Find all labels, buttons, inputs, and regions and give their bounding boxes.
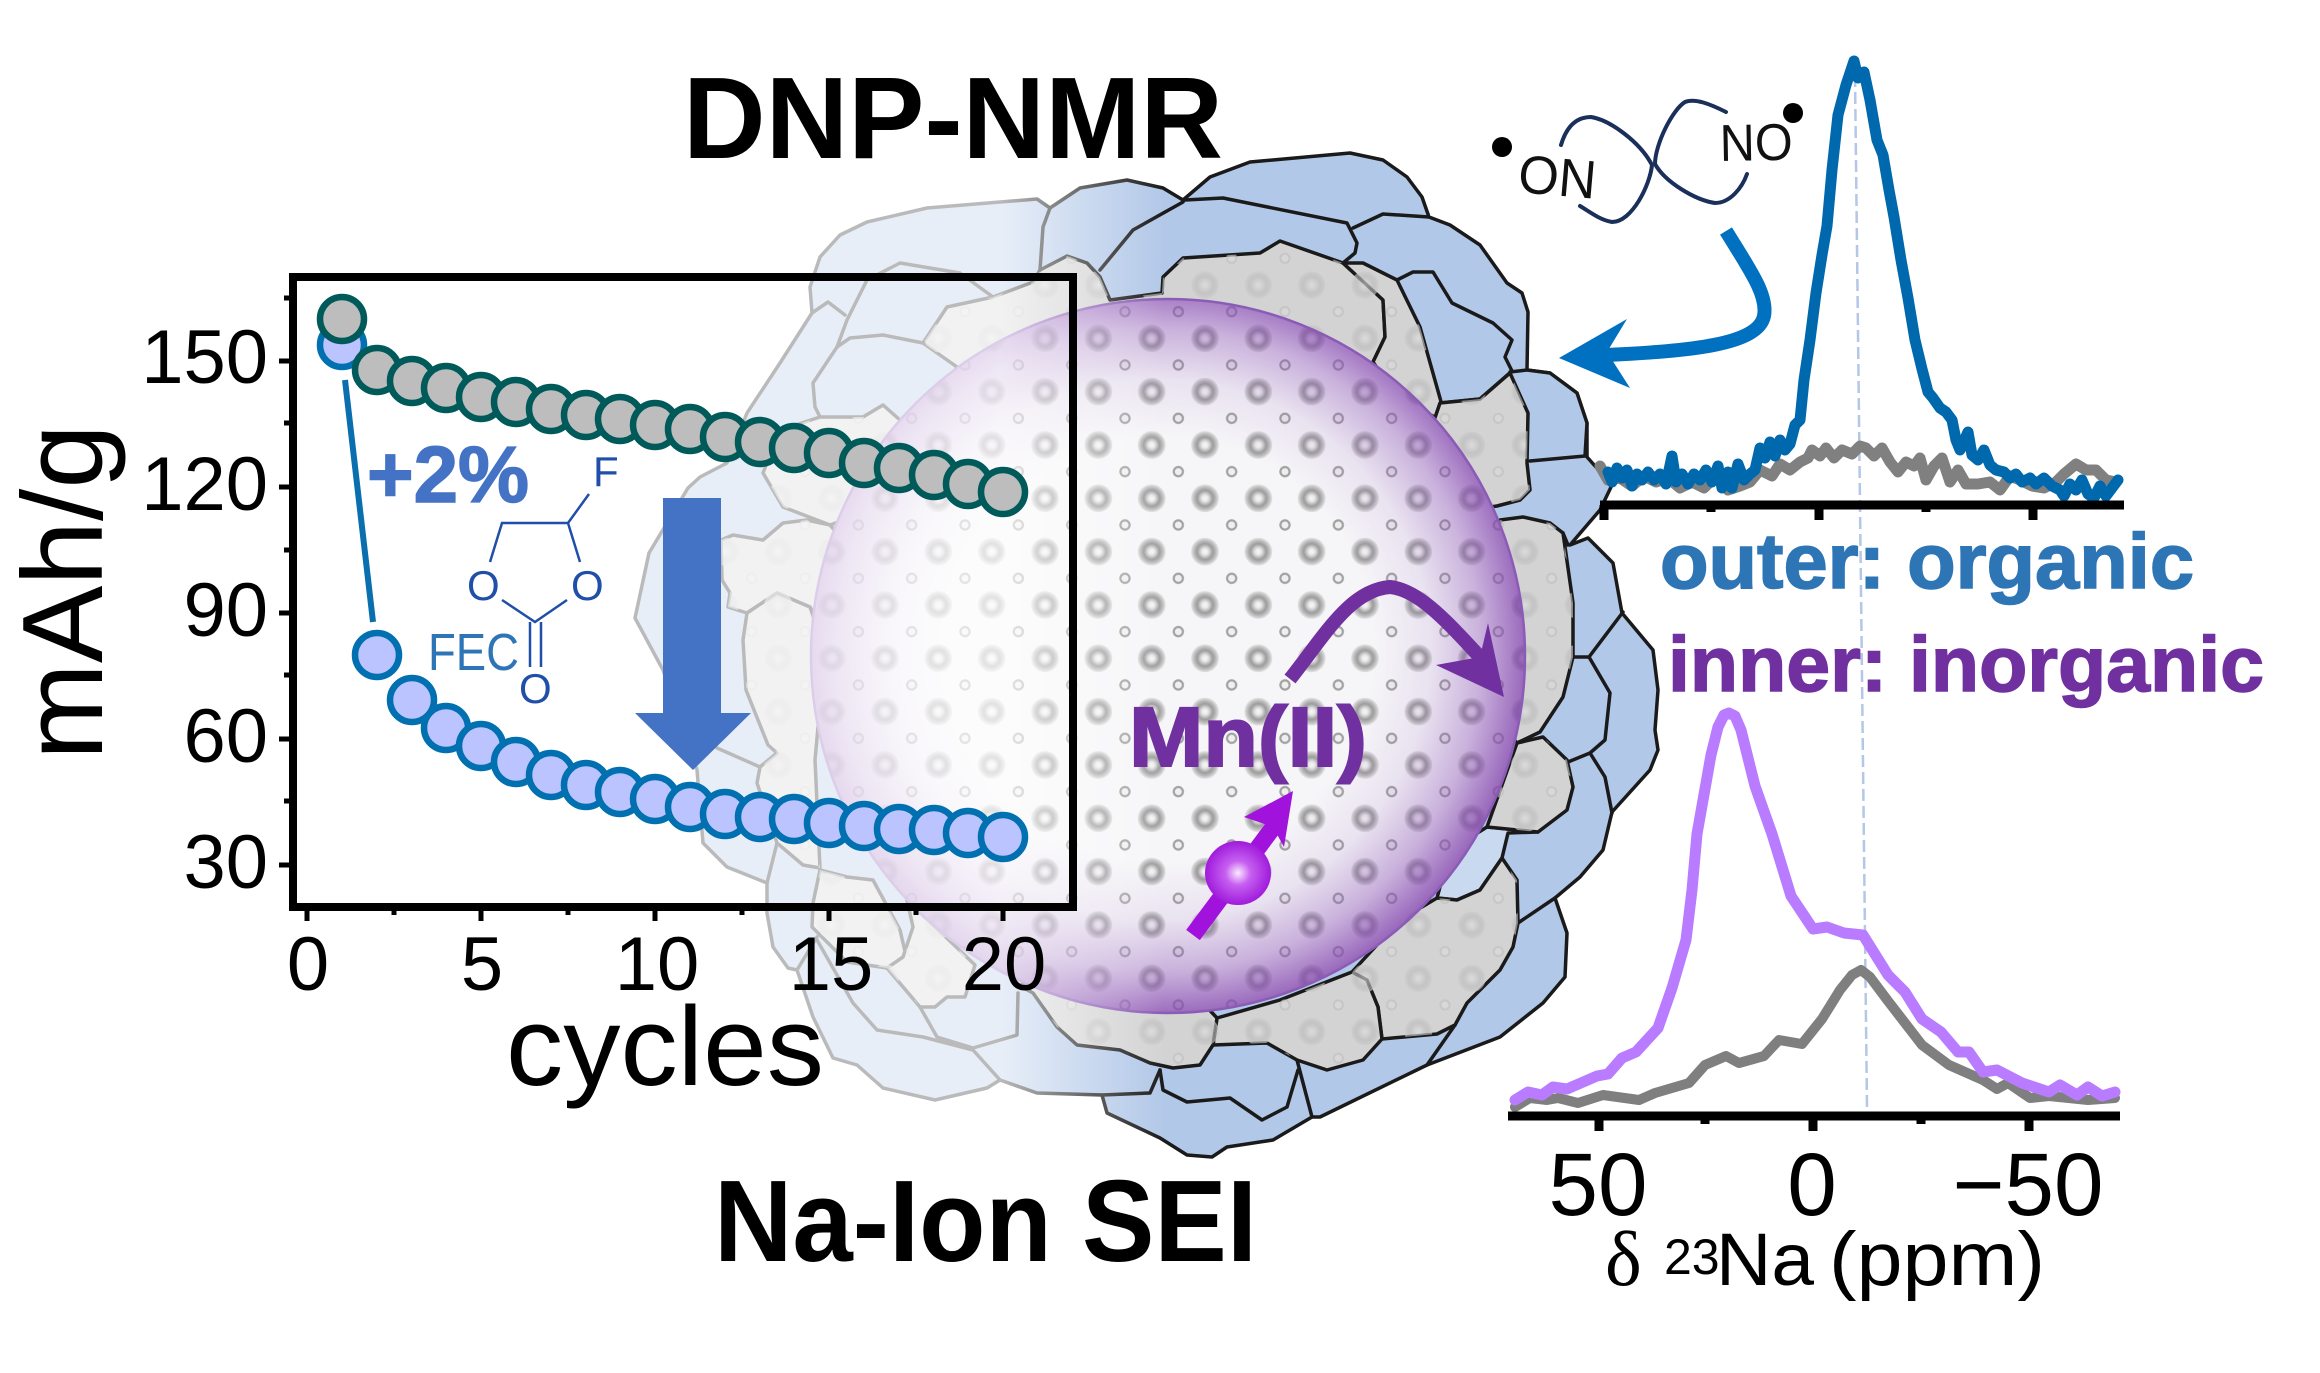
x axis numbers: 10 bbox=[615, 922, 699, 1007]
outer: organic label: outer: organic bbox=[1660, 517, 2194, 605]
x axis numbers: 15 bbox=[789, 922, 873, 1007]
radical AMUPol molecule: ON bbox=[1516, 144, 1599, 211]
outer blue organic SEI layer bbox=[635, 153, 1658, 1157]
FEC molecule: O bbox=[571, 562, 604, 609]
FEC molecule bbox=[428, 448, 619, 712]
left white fade over particle bbox=[600, 150, 1180, 1160]
inner: inorganic label: inner: inorganic bbox=[1668, 620, 2264, 708]
radical AMUPol molecule: NO bbox=[1719, 114, 1793, 173]
blue data series: with no FEC bbox=[320, 323, 1025, 859]
x axis title: cycles bbox=[506, 984, 824, 1109]
faint pores on grey layer bbox=[721, 241, 1573, 1070]
ppm axis numbers bbox=[1548, 1134, 2103, 1234]
y axis numbers: 30 bbox=[183, 820, 268, 905]
capacity drop arrow bbox=[635, 498, 751, 770]
connector line bbox=[345, 380, 373, 622]
FEC molecule: FEC bbox=[428, 624, 519, 682]
dashed reference line bbox=[1855, 75, 1867, 1107]
title: Na-Ion SEI: Na-Ion SEI bbox=[714, 1156, 1257, 1286]
purple trace bbox=[1515, 713, 2115, 1100]
FEC molecule: F bbox=[593, 448, 619, 495]
x axis numbers: 5 bbox=[461, 922, 503, 1007]
x axis numbers bbox=[287, 922, 1046, 1007]
grey trace bbox=[1515, 970, 2115, 1107]
pale blue gap near sphere bbox=[1437, 827, 1538, 900]
grey data series: with FEC bbox=[320, 297, 1025, 514]
+2% label: +2% bbox=[367, 430, 529, 519]
radical AMUPol molecule bbox=[1492, 101, 1803, 222]
y axis numbers: 120 bbox=[141, 442, 268, 527]
upper spectrum bbox=[1600, 61, 2124, 520]
axis bbox=[1600, 505, 2124, 520]
y axis numbers: 60 bbox=[183, 694, 268, 779]
title: DNP-NMR: DNP-NMR bbox=[683, 53, 1223, 183]
purple arrow from Mn(II) bbox=[1290, 587, 1504, 697]
blue trace bbox=[1608, 61, 2118, 498]
axis ticks bbox=[279, 298, 1003, 921]
y axis title: mAh/g bbox=[0, 424, 127, 760]
ppm axis title: (ppm) bbox=[1829, 1217, 2045, 1302]
ppm axis title bbox=[1605, 1215, 2045, 1302]
hard carbon sphere with Mn(II) doping bbox=[810, 298, 1526, 1014]
inner grey inorganic SEI layer bbox=[721, 241, 1573, 1070]
y axis numbers: 150 bbox=[141, 315, 268, 400]
SEI particle bbox=[635, 153, 1658, 1157]
ppm axis numbers: 50 bbox=[1548, 1134, 1648, 1234]
FEC molecule: O bbox=[467, 562, 500, 609]
chart frame bbox=[293, 277, 1073, 907]
x axis numbers: 20 bbox=[962, 922, 1046, 1007]
axis bbox=[1508, 1116, 2120, 1131]
y axis numbers: 90 bbox=[183, 568, 268, 653]
FEC molecule: O bbox=[519, 665, 552, 712]
ppm axis numbers: −50 bbox=[1953, 1134, 2103, 1234]
blue arrow to outer layer bbox=[1559, 231, 1765, 388]
ppm axis title: 23 bbox=[1664, 1229, 1720, 1285]
ppm axis title: δ bbox=[1605, 1215, 1642, 1302]
grey trace bbox=[1600, 446, 2116, 490]
ppm axis numbers: 0 bbox=[1787, 1134, 1837, 1234]
electron spin icon bbox=[1193, 791, 1293, 935]
lower spectrum bbox=[1508, 713, 2120, 1131]
ppm axis title: Na bbox=[1716, 1218, 1815, 1301]
x axis numbers: 0 bbox=[287, 922, 329, 1007]
y axis numbers bbox=[141, 315, 268, 905]
capacity chart bbox=[0, 277, 1073, 1109]
Mn(II) label: Mn(II) bbox=[1129, 690, 1367, 784]
